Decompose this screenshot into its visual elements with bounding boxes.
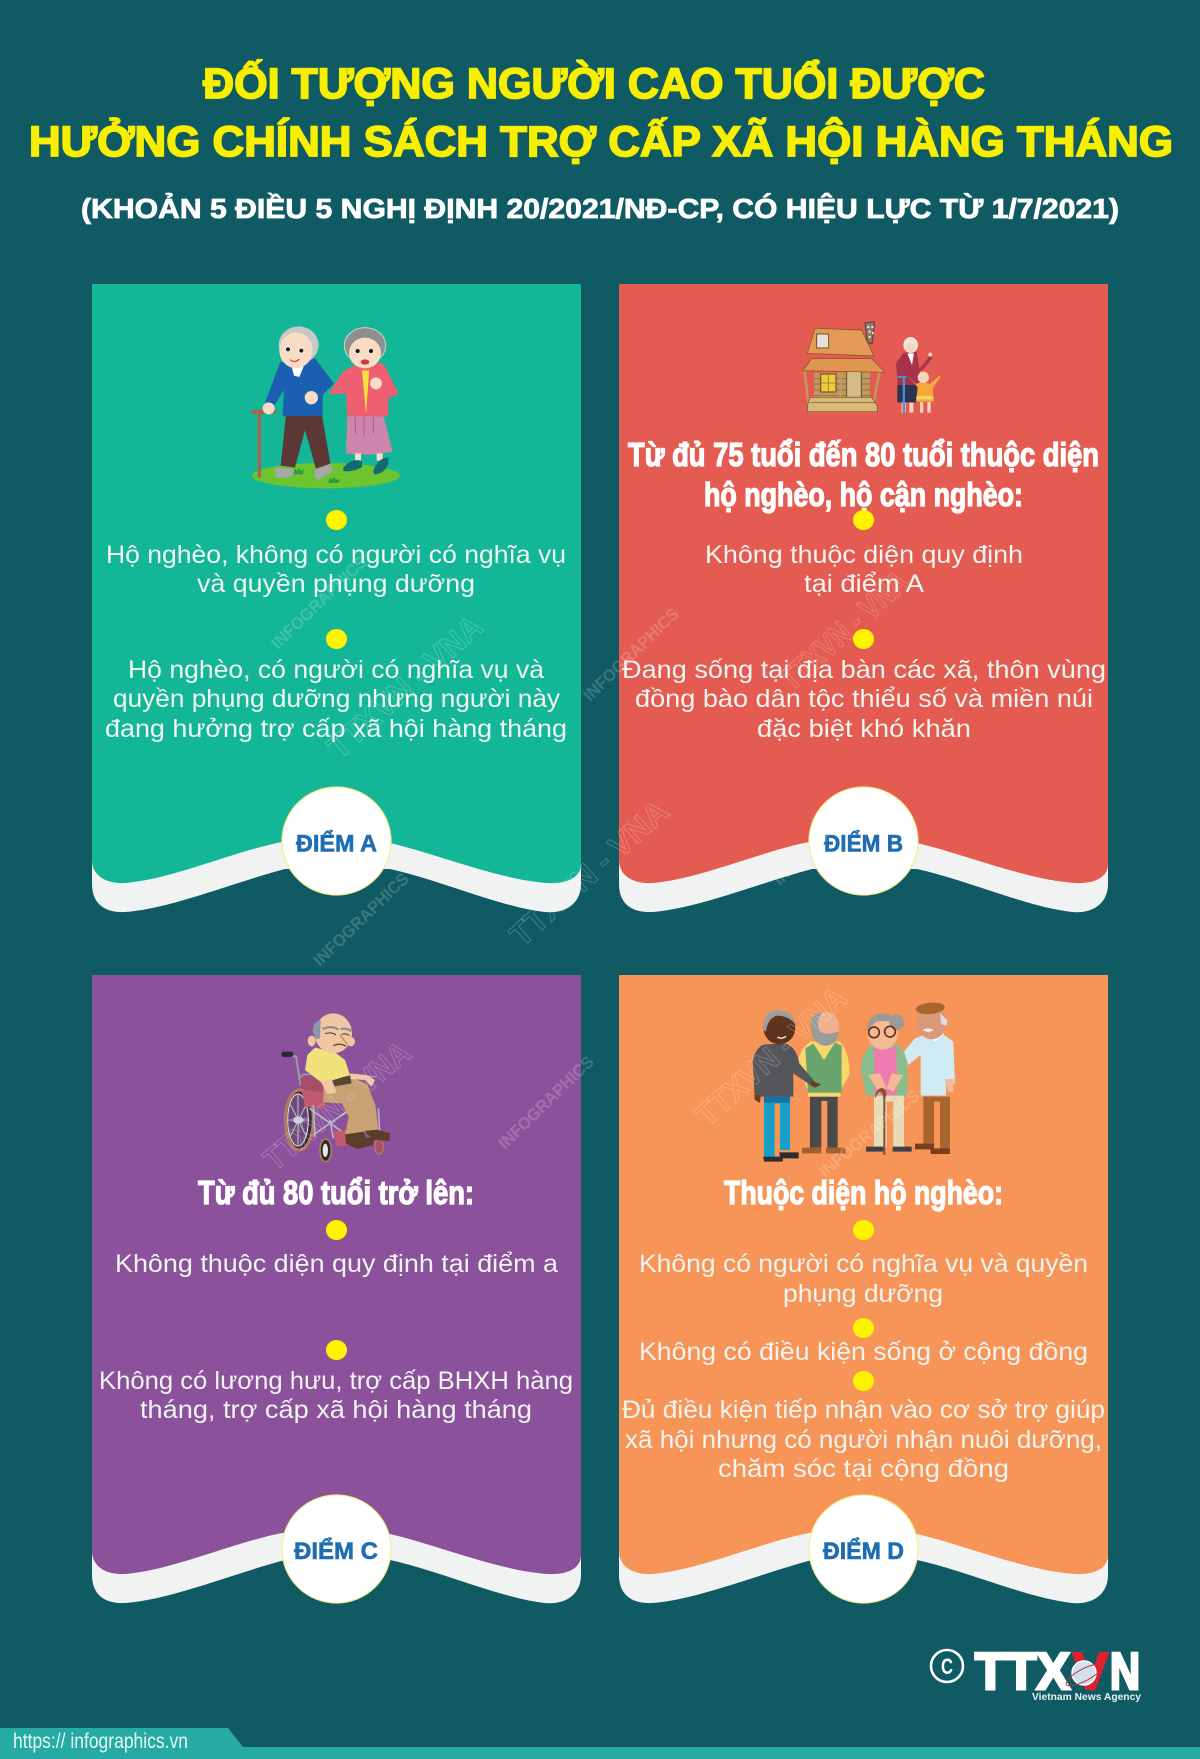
person 2 (798, 1012, 849, 1153)
badge: điểm B: ĐIỂM B (824, 830, 903, 858)
icon: wooden house and grandmother with child (803, 322, 941, 413)
title: HƯỞNG CHÍNH SÁCH TRỢ CẤP XÃ HỘI HÀNG THÁNG (29, 117, 1173, 166)
watermarks (256, 552, 923, 1181)
icon: group of four elderly people (753, 1001, 955, 1162)
badge: điểm D (809, 1495, 918, 1603)
bullet dots A (326, 510, 347, 649)
text: criteria B (622, 541, 1106, 743)
heading C: Từ đủ 80 tuổi trở lên: (198, 1174, 474, 1211)
text: criteria A: đang hưởng trợ cấp xã hội hàng tháng (105, 715, 567, 743)
badge: điểm D: ĐIỂM D (823, 1537, 904, 1565)
watermarks: INFOGRAPHICS (310, 869, 413, 970)
heading D: Thuộc diện hộ nghèo: (724, 1174, 1003, 1211)
icon: old man in wheelchair (281, 1013, 390, 1162)
watermarks: TTXVN - VNA (321, 608, 490, 765)
title (29, 58, 1173, 166)
ribbon background C (92, 975, 581, 1603)
text: criteria A: Hộ nghèo, có người có nghĩa vụ và (128, 656, 544, 684)
panel: điểm C (92, 975, 581, 1603)
watermarks: TTXVN - VNA (256, 1034, 417, 1177)
logo: TTXVN Vietnam News Agency: C (941, 1654, 953, 1679)
logo: TTXVN Vietnam News Agency: V (1073, 1643, 1108, 1701)
watermarks: TTXVN - VNA (689, 979, 854, 1133)
watermarks: TTXVN - VNA (503, 793, 675, 953)
watermarks: INFOGRAPHICS (495, 1052, 598, 1153)
text: criteria D: chăm sóc tại cộng đồng (718, 1455, 1009, 1483)
text: criteria D: phụng dưỡng (783, 1280, 943, 1308)
ribbon background A (92, 284, 581, 912)
watermarks: INFOGRAPHICS (268, 552, 371, 653)
text: criteria C: Không có lương hưu, trợ cấp BHXH hàng (99, 1367, 573, 1395)
watermarks: INFOGRAPHICS (580, 604, 683, 705)
text: criteria B: Đang sống tại địa bàn các xã, thôn vùng (622, 656, 1106, 684)
text: criteria A (105, 541, 567, 743)
watermarks: INFOGRAPHICS (815, 1086, 923, 1181)
footer url: https:// infographics.vn (13, 1730, 188, 1753)
heading B (628, 436, 1099, 513)
ribbon background B (619, 284, 1108, 912)
text: criteria B: đồng bào dân tộc thiểu số và miền núi (635, 685, 1093, 713)
icon: elderly couple walking (252, 326, 400, 488)
text: criteria D (622, 1250, 1105, 1483)
ribbon background D (619, 975, 1108, 1603)
text: criteria D: Không có điều kiện sống ở cộng đồng (639, 1338, 1088, 1366)
heading B: hộ nghèo, hộ cận nghèo: (704, 476, 1023, 513)
text: criteria D: Đủ điều kiện tiếp nhận vào cơ sở trợ giúp (622, 1396, 1105, 1424)
logo: TTXVN Vietnam News Agency: N (1110, 1643, 1140, 1701)
person 3 (861, 1013, 912, 1155)
person 4 (904, 1001, 955, 1154)
watermarks: INFOGRAPHICS (770, 788, 873, 889)
text: criteria A: Hộ nghèo, không có người có nghĩa vụ (106, 541, 566, 569)
logo: TTXVN Vietnam News Agency: TTX (975, 1643, 1070, 1701)
text: criteria B: tại điểm A (804, 570, 924, 598)
text: criteria A: và quyền phụng dưỡng (197, 570, 475, 598)
badge: điểm C: ĐIỂM C (294, 1537, 378, 1565)
subtitle: (KHOẢN 5 ĐIỀU 5 NGHỊ ĐỊNH 20/2021/NĐ-CP, CÓ HIỆU LỰC TỪ 1/7/2021) (81, 192, 1119, 224)
text: criteria D: Không có người có nghĩa vụ và quyền (639, 1250, 1088, 1278)
person 1 (753, 1010, 821, 1162)
logo: TTXVN Vietnam News Agency: Vietnam News Agency (1032, 1691, 1141, 1703)
title: ĐỐI TƯỢNG NGƯỜI CAO TUỔI ĐƯỢC (203, 58, 985, 108)
text: criteria C: Không thuộc diện quy định tại điểm a (115, 1250, 558, 1278)
badge: điểm C (282, 1495, 391, 1603)
text: criteria A: quyền phụng dưỡng nhưng người này (113, 685, 561, 713)
bullet dots D (853, 1220, 874, 1391)
badge: điểm A: ĐIỂM A (296, 830, 377, 858)
bullet dots C (326, 1220, 347, 1360)
watermarks: TTXVN - VNA (773, 563, 916, 697)
text: criteria D: xã hội nhưng có người nhận nuôi dưỡng, (625, 1426, 1102, 1454)
logo: TTXVN Vietnam News Agency (931, 1643, 1141, 1703)
text: criteria B: Không thuộc diện quy định (705, 541, 1023, 569)
panel: điểm A (92, 284, 581, 912)
panel: điểm B (619, 284, 1108, 912)
heading B: Từ đủ 75 tuổi đến 80 tuổi thuộc diện (628, 436, 1099, 473)
badge: điểm A (282, 787, 391, 895)
bullet dots B (853, 510, 874, 649)
text: criteria C (99, 1250, 573, 1424)
panel: điểm D (619, 975, 1108, 1603)
text: criteria B: đặc biệt khó khăn (757, 715, 971, 743)
footer bar (0, 1728, 1200, 1759)
badge: điểm B (809, 787, 918, 895)
text: criteria C: tháng, trợ cấp xã hội hàng tháng (140, 1396, 532, 1424)
